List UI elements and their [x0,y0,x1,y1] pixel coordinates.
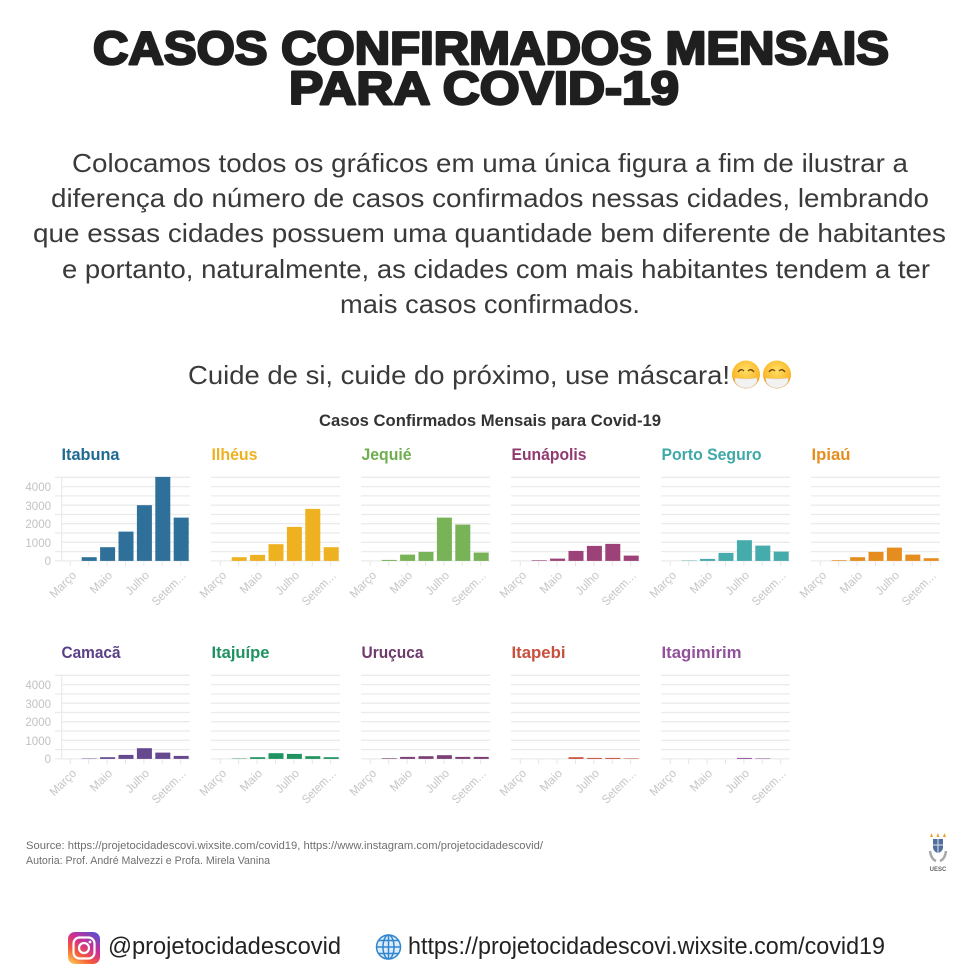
panel: Itabuna: Julho [122,568,152,598]
panel: Uruçuca: Maio [387,766,415,795]
panel: Itagimirim: Setem… [749,766,789,807]
panel: Itabuna: 0 [45,556,51,568]
panel: Uruçuca [347,643,490,807]
panel: Ipiaú: Março [797,568,829,601]
panel: Itapebi: Itapebi [512,643,566,662]
panel: Camacã: Julho [122,766,152,796]
panel: Jequié: Jequié [362,445,412,464]
intro text: diferença do número de casos confirmados nessas cidades, lembrando [51,183,929,213]
panel: Itapebi: Setem… [599,766,639,807]
panel: Itagimirim: Maio [687,766,715,795]
panel: Itapebi: Maio [537,766,565,795]
title: CASOS CONFIRMADOS MENSAIS [93,22,889,74]
title [93,22,889,114]
panel: Uruçuca: Setem… [449,766,489,807]
panel: Porto Seguro: Julho [722,568,752,598]
panel: Porto Seguro [647,445,790,609]
panel: Camacã: Maio [87,766,115,795]
panel: Camacã: Camacã [62,643,121,662]
panel: Jequié: Maio [387,568,415,597]
source note: Source: https://projetocidadescovi.wixsite.com/covid19, https://www.instagram.com/projetocidadescovid/ [26,840,544,852]
panel: Porto Seguro: Março [647,568,679,601]
panel: Jequié [347,445,490,609]
instagram handle: @projetocidadescovid [108,933,341,960]
panel: Itajuípe [197,643,340,807]
panel: Uruçuca: Março [347,766,379,799]
panel: Eunápolis: Maio [537,568,565,597]
panel: Uruçuca: Uruçuca [362,643,424,662]
website url: https://projetocidadescovi.wixsite.com/covid19 [408,933,885,960]
panel: Itagimirim: Março [647,766,679,799]
panel: Itabuna: Março [47,568,79,601]
icon: mask emoji 1 [732,360,760,388]
panel: Ipiaú: Setem… [899,568,939,609]
source note [26,840,544,867]
panel: Camacã: 0 [45,754,51,766]
panel: Camacã: Setem… [149,766,189,807]
intro text: que essas cidades possuem uma quantidade bem diferente de habitantes [33,218,946,248]
panel: Jequié: Julho [422,568,452,598]
panel: Camacã: 1000 [25,736,51,748]
panel: Ilhéus: Março [197,568,229,601]
panel: Ipiaú: Julho [872,568,902,598]
panel: Eunápolis: Março [497,568,529,601]
call to action: Cuide de si, cuide do próximo, use máscara! [188,360,730,390]
panel: Itagimirim [647,643,790,807]
panel: Camacã: 2000 [25,717,51,729]
panel: Itagimirim: Itagimirim [662,643,742,662]
panel: Camacã: 3000 [25,699,51,711]
panel: Ilhéus: Setem… [299,568,339,609]
panel: Itapebi: Julho [572,766,602,796]
panel: Itabuna: 4000 [25,482,51,494]
panel: Eunápolis: Setem… [599,568,639,609]
icon: mask emoji 2 [763,360,791,388]
panel: Itabuna [25,445,190,609]
panel: Itabuna: Maio [87,568,115,597]
icon: globe [376,935,400,959]
panel: Itabuna: Itabuna [62,445,120,464]
panel: Itajuípe: Itajuípe [212,643,270,662]
panel: Itapebi: Março [497,766,529,799]
source note: Autoria: Prof. André Malvezzi e Profa. Mirela Vanina [26,855,271,867]
icon: UESC logo: UESC [930,867,947,873]
panel: Camacã: 4000 [25,680,51,692]
panel: Itabuna: 2000 [25,519,51,531]
intro text: Colocamos todos os gráficos em uma única figura a fim de ilustrar a [72,148,909,178]
panel: Itabuna: 1000 [25,538,51,550]
panel: Ilhéus: Julho [272,568,302,598]
intro text: mais casos confirmados. [340,289,640,319]
icon: instagram [68,932,100,964]
panel: Ilhéus [197,445,340,609]
panel: Porto Seguro: Porto Seguro [662,445,762,464]
panel: Itajuípe: Março [197,766,229,799]
icon: UESC logo [930,833,947,873]
panel: Ipiaú: Ipiaú [812,445,850,464]
panel: Itabuna: Setem… [149,568,189,609]
panel: Porto Seguro: Maio [687,568,715,597]
panel: Ilhéus: Maio [237,568,265,597]
chart title: Casos Confirmados Mensais para Covid-19 [319,411,661,430]
panel: Itajuípe: Setem… [299,766,339,807]
panel: Itabuna: 3000 [25,501,51,513]
panel: Itapebi [497,643,640,807]
panel: Uruçuca: Julho [422,766,452,796]
panel: Ilhéus: Ilhéus [212,445,258,464]
panel: Jequié: Setem… [449,568,489,609]
panel: Eunápolis: Eunápolis [512,445,586,464]
panel: Jequié: Março [347,568,379,601]
panel: Itajuípe: Maio [237,766,265,795]
title: PARA COVID-19 [289,62,679,114]
panel: Ipiaú: Maio [837,568,865,597]
intro text [33,148,946,319]
panel: Camacã [25,643,190,807]
panel: Itagimirim: Julho [722,766,752,796]
panel: Eunápolis: Julho [572,568,602,598]
panel: Camacã: Março [47,766,79,799]
panel: Porto Seguro: Setem… [749,568,789,609]
panel: Eunápolis [497,445,640,609]
panel: Itajuípe: Julho [272,766,302,796]
panel: Ipiaú [797,445,940,609]
intro text: e portanto, naturalmente, as cidades com mais habitantes tendem a ter [62,254,930,284]
